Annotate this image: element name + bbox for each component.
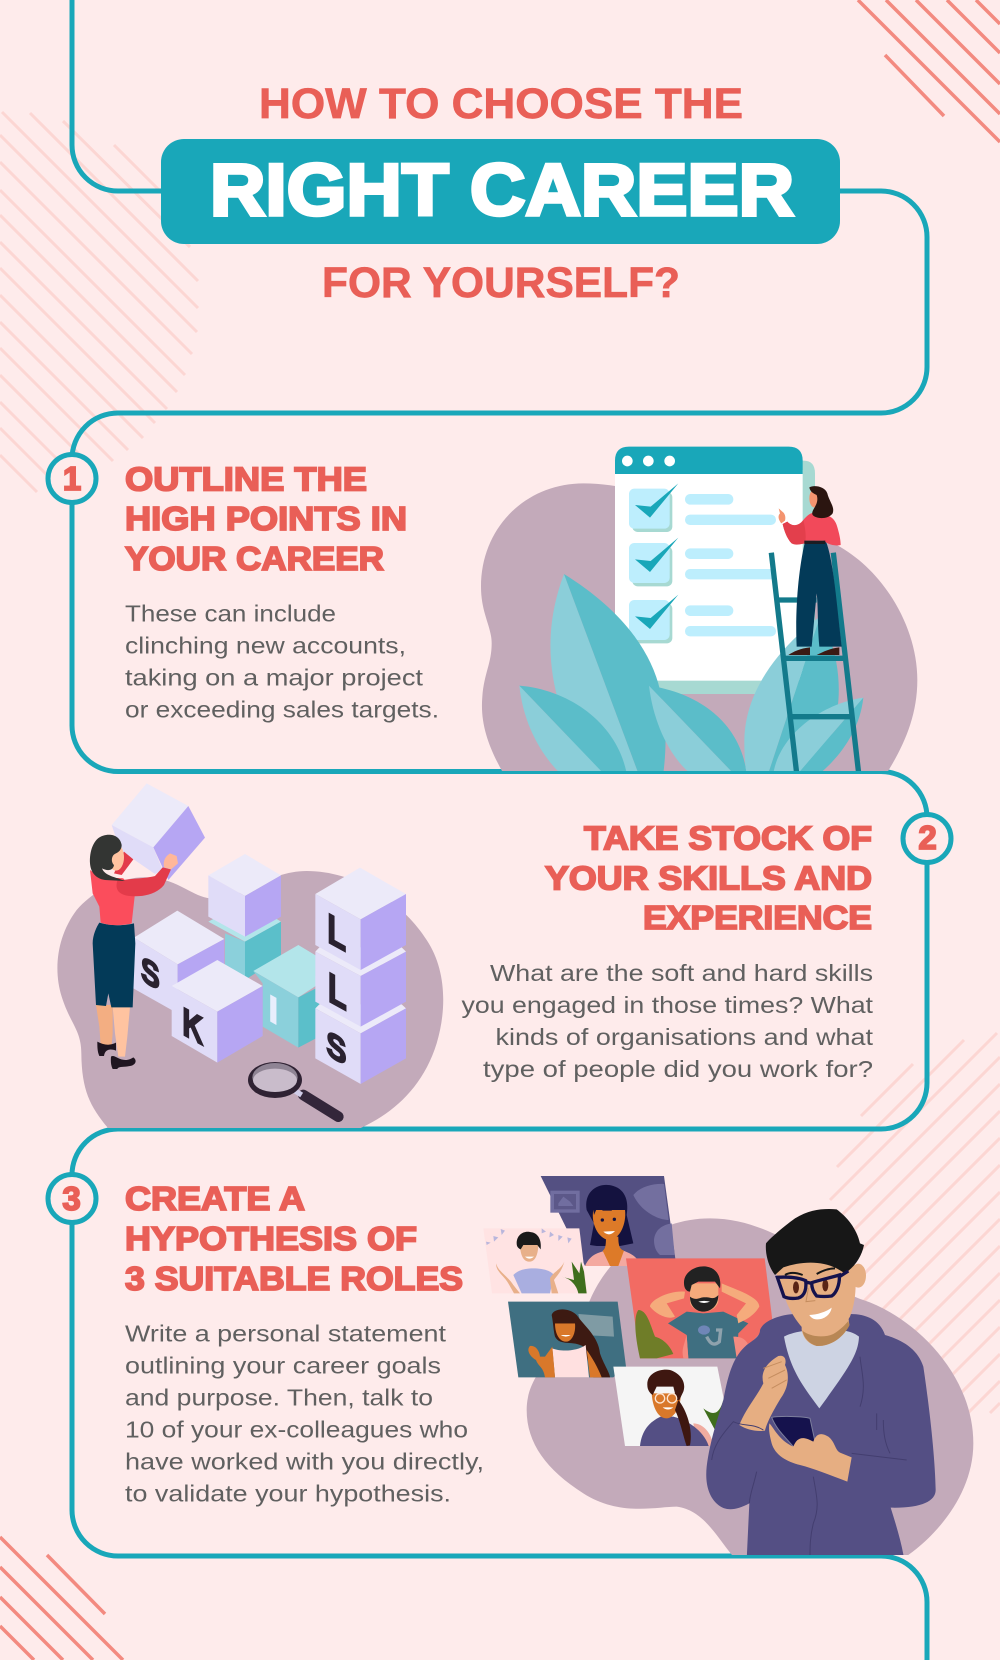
step 1 badge (48, 454, 96, 502)
illustration: checklist and woman on ladder (481, 447, 917, 773)
title banner (161, 139, 840, 244)
step 3 body text: Write a personal statement (125, 1320, 447, 1346)
step 1 body text: These can include (125, 600, 336, 626)
step 1 body text (125, 600, 439, 722)
step 3 heading (125, 1181, 463, 1298)
illustration: man with phone and video call cards (483, 1176, 973, 1560)
step 1 badge: 1 (63, 460, 81, 497)
step 2 heading (545, 820, 872, 937)
woman (779, 486, 842, 655)
step 1 heading: OUTLINE THE (125, 462, 367, 498)
step 3 heading: CREATE A (125, 1181, 305, 1218)
checklist window (615, 447, 815, 694)
step 3 heading: 3 SUITABLE ROLES (125, 1261, 463, 1298)
step 3 body text: outlining your career goals (125, 1352, 441, 1378)
cube stack: letters L L S: L (328, 964, 347, 1020)
step 1 heading (125, 462, 407, 578)
step 1 heading: YOUR CAREER (125, 541, 384, 578)
man with phone (706, 1209, 936, 1560)
step 1 body text: taking on a major project (125, 664, 424, 690)
step 3 badge (48, 1174, 96, 1222)
step 3 body text: have worked with you directly, (125, 1448, 484, 1474)
cube: letter I: I (268, 986, 279, 1034)
flying cube (112, 783, 205, 880)
leaves (519, 574, 863, 773)
blob (527, 1218, 973, 1558)
video card: teal (508, 1302, 626, 1377)
step 3 body text: and purpose. Then, talk to (125, 1384, 433, 1410)
cube: tall back column (208, 854, 281, 980)
illustration: skills cubes (57, 783, 443, 1128)
video card: pale pink (483, 1228, 587, 1293)
step 2 body text: kinds of organisations and what (496, 1024, 874, 1050)
step 3 body text (125, 1320, 484, 1506)
woman lifting cube (90, 835, 178, 1069)
cube: letter K: K (182, 999, 203, 1054)
magnifying glass (248, 1062, 338, 1117)
step 2 badge (903, 814, 951, 862)
cube stack: letters L L S: L (327, 905, 346, 961)
video card: purple (541, 1176, 675, 1266)
blob (481, 483, 917, 773)
title banner: RIGHT CAREER (210, 150, 794, 231)
video card: white (613, 1367, 724, 1446)
step 2 heading: TAKE STOCK OF (584, 820, 872, 858)
video card: coral (626, 1258, 772, 1358)
step 2 body text: What are the soft and hard skills (490, 960, 873, 986)
title: FOR YOURSELF? (322, 260, 680, 307)
cube stack: letters L L S: S (326, 1024, 346, 1074)
step 3 body text: to validate your hypothesis. (125, 1480, 451, 1506)
cube: letter S: S (141, 948, 160, 998)
title: HOW TO CHOOSE THE (259, 81, 743, 128)
step 2 badge: 2 (918, 819, 937, 856)
step 2 body text: you engaged in those times? What (462, 992, 874, 1018)
cube: letter S (133, 911, 224, 1013)
step 2 heading: EXPERIENCE (643, 900, 872, 937)
cube: letter K (172, 960, 263, 1063)
step 3 heading: HYPOTHESIS OF (125, 1221, 417, 1258)
cube stack: letters L L S (315, 868, 406, 1084)
step 2 body text: type of people did you work for? (483, 1056, 873, 1082)
title (161, 81, 840, 307)
step 1 body text: clinching new accounts, (125, 632, 406, 658)
ladder (771, 553, 859, 773)
step 1 body text: or exceeding sales targets. (125, 696, 439, 722)
step 1 heading: HIGH POINTS IN (125, 501, 407, 538)
step 2 body text (462, 960, 874, 1082)
blob (57, 871, 443, 1128)
cube: letter I (254, 945, 320, 1048)
step 3 badge: 3 (62, 1180, 81, 1217)
step 2 heading: YOUR SKILLS AND (545, 860, 872, 898)
checklist rows (629, 483, 776, 643)
step 3 body text: 10 of your ex-colleagues who (125, 1416, 468, 1442)
